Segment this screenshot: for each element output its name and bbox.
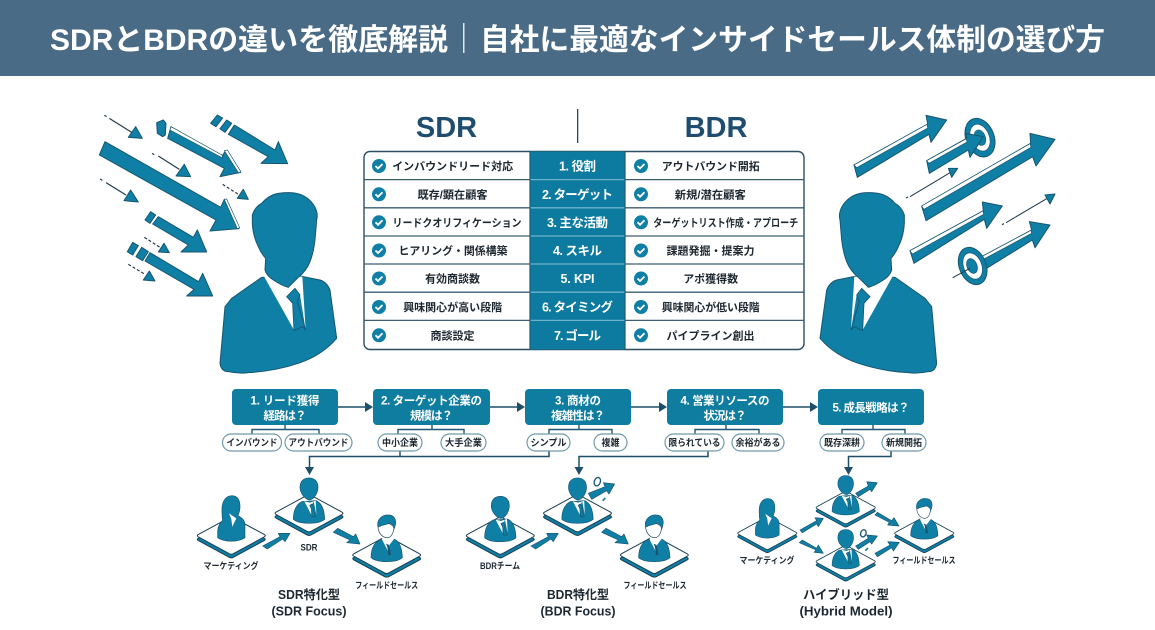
model: BDR Focus — [466, 477, 688, 618]
model name — [272, 587, 346, 618]
BDR node — [816, 530, 875, 581]
labels: フィールドセールス — [624, 580, 686, 590]
option pills: インバウンド — [226, 438, 278, 449]
center column category labels: 3. 主な活動 — [547, 215, 608, 230]
comparison table — [364, 152, 804, 350]
SDR column text: リードクオリフィケーション — [392, 216, 522, 229]
SDR column text — [392, 159, 522, 342]
SDR node — [275, 478, 343, 535]
center column category labels: 6. タイミング — [542, 300, 613, 314]
flow connectors — [252, 402, 905, 475]
step 5: 5. 成長戦略は？ — [832, 400, 910, 414]
option pills: 限られている — [668, 437, 720, 449]
SDR column text: 興味関心が高い段階 — [403, 300, 502, 314]
outbound arrow and target — [588, 477, 615, 501]
BDR node — [544, 478, 611, 535]
center column category labels: 2. ターゲット — [542, 187, 613, 202]
illustration: SDR inbound person with arrows — [99, 115, 337, 373]
step 4 — [667, 389, 783, 425]
divider between SDR and BDR headings — [577, 109, 578, 143]
step 4: 4. 営業リソースの — [680, 394, 770, 408]
BDR column text: アウトバウンド開拓 — [662, 159, 760, 173]
labels — [204, 542, 418, 590]
flow arrows — [263, 528, 360, 549]
labels: SDR — [300, 542, 318, 552]
BDR team node — [466, 496, 534, 558]
heading: SDR: SDR — [416, 112, 477, 144]
step 4: 状況は？ — [704, 408, 746, 422]
SDR column text: 有効商談数 — [425, 272, 480, 286]
marketing node — [197, 496, 265, 558]
center column category labels: 4. スキル — [553, 244, 602, 258]
option pills: 既存深耕 — [824, 437, 860, 449]
option pills — [222, 434, 926, 451]
step 2 — [373, 389, 490, 425]
field sales node — [620, 515, 688, 577]
SDR column check icons — [372, 159, 386, 342]
model name: (BDR Focus) — [540, 604, 616, 618]
option pills: 余裕がある — [736, 437, 780, 449]
step 1 — [232, 389, 338, 425]
model name — [800, 587, 892, 618]
field sales node — [895, 498, 954, 553]
SDR column text: ヒアリング・関係構築 — [398, 244, 508, 258]
field sales node — [353, 515, 421, 577]
icon: person silhouette — [220, 193, 337, 373]
option pills: シンプル — [530, 438, 567, 449]
labels: マーケティング — [740, 554, 794, 566]
labels — [480, 561, 686, 590]
header banner — [0, 0, 1155, 76]
SDR column text: 商談設定 — [430, 328, 474, 342]
model name: BDR特化型 — [547, 587, 609, 602]
icon: outbound arrows and targets — [854, 114, 1055, 289]
step 3 — [525, 389, 631, 425]
model name: (SDR Focus) — [272, 604, 346, 618]
labels — [740, 554, 956, 566]
model name: ハイブリッド型 — [803, 587, 889, 602]
SDR column text: 既存/顕在顧客 — [418, 187, 488, 201]
SDR column text: インバウンドリード対応 — [392, 159, 513, 173]
option pills: 複雑 — [602, 437, 620, 449]
SDR node — [816, 476, 875, 527]
option pills: 新規開拓 — [886, 437, 922, 449]
BDR column text: パイプライン創出 — [666, 328, 754, 342]
BDR column text: 新規/潜在顧客 — [675, 187, 746, 201]
step 2: 2. ターゲット企業の — [381, 394, 482, 408]
option pills: 大手企業 — [445, 437, 482, 449]
center column category labels: 1. 役割 — [559, 158, 596, 174]
BDR column text: ターゲットリスト作成・アプローチ — [653, 215, 798, 229]
step 1: 経路は？ — [264, 408, 306, 422]
marketing node — [738, 498, 797, 553]
model name — [540, 587, 616, 618]
illustration: BDR outbound person with arrows — [820, 114, 1055, 373]
flow arrows — [799, 482, 899, 557]
title: left part: SDRとBDRの違いを徹底解説 — [50, 24, 448, 57]
decision flow — [222, 389, 926, 475]
title: right part: 自社に最適なインサイドセールス体制の選び方 — [480, 24, 1105, 57]
BDR column text — [653, 159, 798, 342]
center column category labels: 5. KPI — [560, 272, 594, 286]
labels: BDRチーム — [480, 561, 520, 571]
model name: (Hybrid Model) — [800, 604, 892, 618]
center column category labels: 7. ゴール — [554, 328, 601, 343]
BDR column text: アポ獲得数 — [683, 272, 738, 286]
option pills: 中小企業 — [382, 437, 418, 449]
step 2: 規模は？ — [410, 408, 453, 422]
step 1: 1. リード獲得 — [250, 394, 320, 408]
BDR column text: 課題発掘・提案力 — [666, 244, 754, 258]
BDR column text: 興味関心が低い段階 — [662, 300, 760, 314]
model: SDR Focus — [197, 478, 421, 618]
step 3: 3. 商材の — [555, 394, 601, 408]
heading: BDR: BDR — [685, 112, 747, 144]
model: Hybrid — [738, 476, 956, 618]
icon: person silhouette — [820, 193, 937, 373]
labels: フィールドセールス — [892, 556, 956, 566]
labels: フィールドセールス — [355, 580, 418, 590]
step 5 — [818, 389, 924, 425]
BDR column check icons — [634, 159, 648, 342]
center column category labels — [542, 158, 613, 343]
option pills: アウトバウンド — [288, 438, 348, 449]
flow arrows — [531, 528, 628, 549]
labels: マーケティング — [204, 560, 258, 571]
model name: SDR特化型 — [278, 587, 340, 602]
step 3: 複雑性は？ — [551, 408, 605, 422]
icon: inbound arrows — [99, 115, 288, 296]
